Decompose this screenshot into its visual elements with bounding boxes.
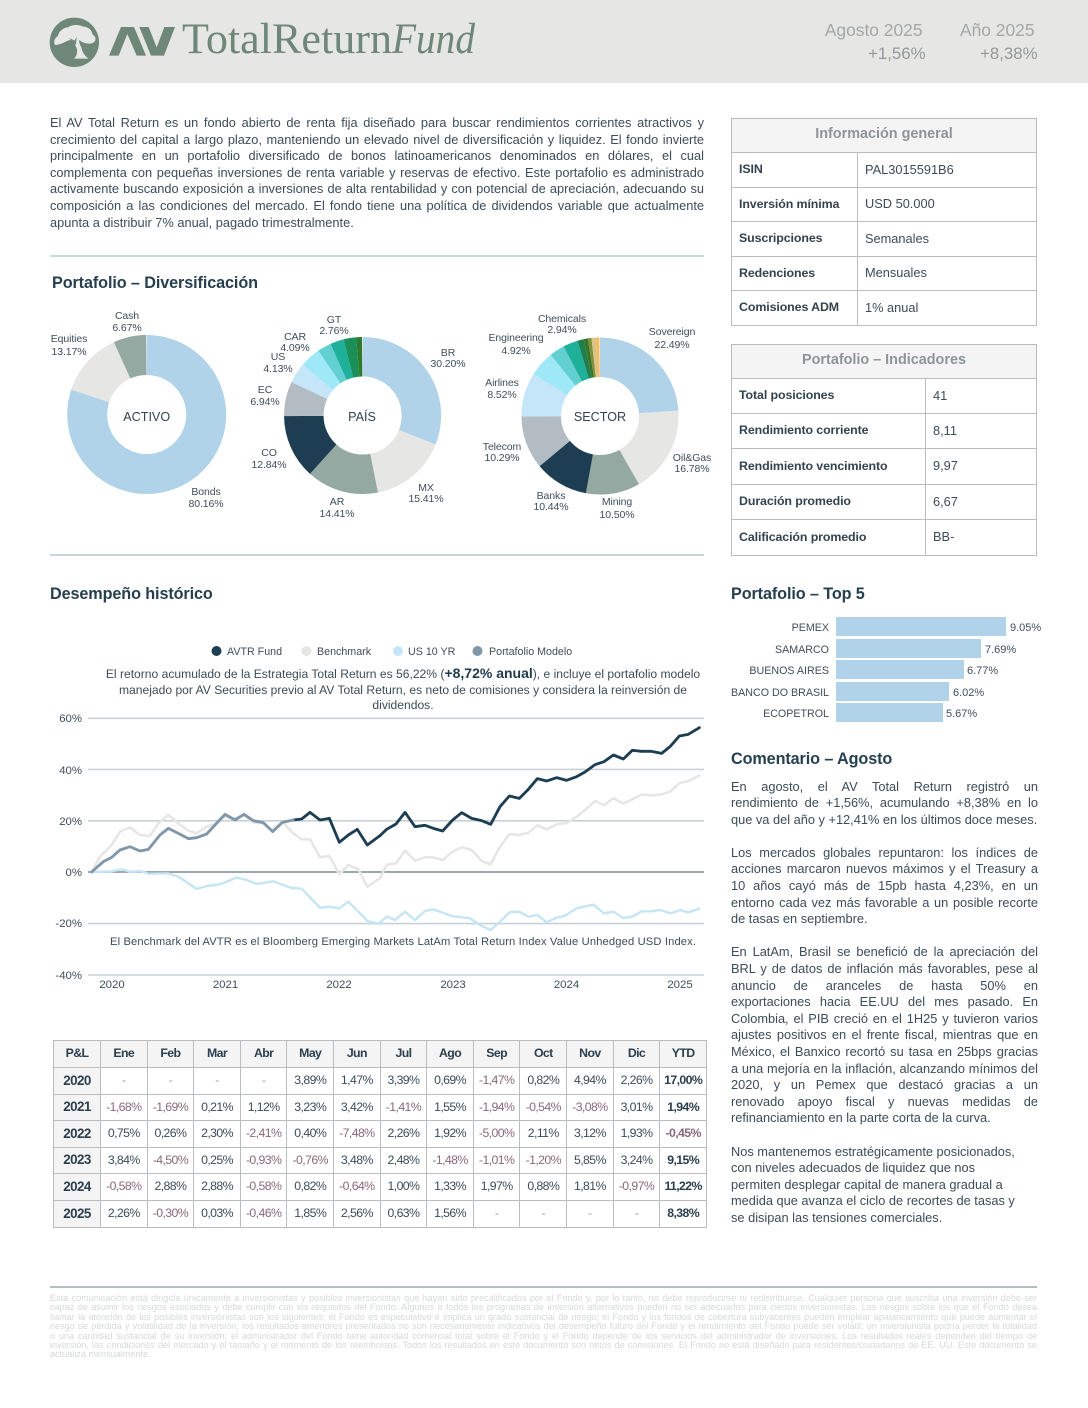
heading: Comentario Agosto: Comentario – Agosto	[731, 750, 892, 768]
heading: Portafolio Diversificación: Portafolio – Diversificación	[52, 274, 258, 292]
P&L table: Mar	[207, 1046, 227, 1060]
bar chart: Top 5: BANCO DO BRASIL	[731, 687, 829, 699]
labels: PAÍS: AR	[330, 496, 345, 508]
chart legend	[212, 646, 572, 658]
labels: SECTOR: Chemicals	[538, 313, 586, 325]
P&L table: -0,54%	[526, 1100, 561, 1114]
panel: Portafolio Indicadores: 9,97	[933, 458, 958, 473]
P&L table: 3,01%	[621, 1100, 652, 1114]
P&L table: -1,41%	[386, 1100, 421, 1114]
series: US 10 YR	[92, 869, 699, 930]
labels: ACTIVO: Cash	[115, 310, 139, 322]
P&L table: -0,58%	[106, 1179, 141, 1193]
P&L table: Ene	[113, 1046, 134, 1060]
P&L table: 2,30%	[201, 1126, 233, 1140]
axis labels: 2020	[99, 979, 125, 991]
labels: ACTIVO: 80.16%	[188, 498, 224, 510]
labels: PAÍS: 4.13%	[263, 363, 293, 375]
labels: SECTOR	[483, 313, 711, 521]
commentary text: de tasas en septiembre.	[731, 911, 868, 926]
P&L table: 3,24%	[621, 1152, 652, 1166]
commentary text	[731, 778, 1038, 1225]
axis labels: 20%	[59, 816, 82, 828]
P&L table: Jun	[347, 1046, 367, 1060]
P&L table: -	[635, 1206, 638, 1220]
P&L table: 1,94%	[667, 1100, 699, 1114]
labels: SECTOR: 2.94%	[547, 324, 577, 336]
labels: PAÍS: CO	[261, 447, 277, 459]
panel: Portafolio Indicadores: BB-	[933, 529, 954, 544]
labels: PAÍS: CAR	[284, 331, 306, 343]
P&L table: -	[169, 1073, 172, 1087]
donut: SECTOR	[541, 357, 659, 475]
axis labels: -40%	[55, 970, 82, 982]
P&L table: -	[215, 1073, 219, 1087]
P&L table: Ago	[439, 1046, 461, 1060]
P&L table: 2,48%	[388, 1152, 419, 1166]
P&L table: 1,55%	[434, 1100, 466, 1114]
P&L table: YTD	[672, 1046, 695, 1060]
P&L table: Abr	[254, 1046, 273, 1060]
panel: Información general	[731, 118, 1037, 326]
axis labels: 2024	[554, 979, 579, 991]
commentary text: 2020, y un Pemex que destacó gracias a un	[731, 1077, 1038, 1092]
labels: ACTIVO: 6.67%	[112, 322, 142, 334]
commentary text: que va del año y +12,41% en los últimos doce meses.	[731, 812, 1037, 827]
panel: Portafolio Indicadores: Duración promedio	[739, 494, 851, 508]
P&L table: -0,46%	[246, 1206, 281, 1220]
header figure: Agosto 2025: Agosto 2025	[825, 20, 922, 40]
bar chart: Top 5: 6.77%	[967, 665, 998, 677]
panel: Portafolio Indicadores: 41	[933, 388, 947, 402]
P&L table: Nov	[579, 1046, 601, 1060]
panel: Información general: 1% anual	[865, 300, 918, 314]
intro paragraph: El AV Total Return es un fondo abierto de renta fija diseñado para buscar rendimientos corrientes atractivos y	[50, 115, 704, 130]
intro paragraph: complementa con pequeñas inversiones de renta variable y reservas de efectivo. Este portafolio es administrado	[50, 165, 704, 180]
panel: Portafolio Indicadores	[731, 344, 1037, 556]
labels: PAÍS: 12.84%	[251, 459, 287, 471]
labels: PAÍS: MX	[418, 482, 434, 494]
labels: PAÍS: PAÍS	[348, 409, 376, 424]
commentary text: con niveles adecuados de liquidez que nos	[731, 1160, 975, 1175]
bar chart: Top 5: 7.69%	[985, 644, 1016, 656]
axis labels: 2023	[440, 979, 466, 991]
labels: PAÍS: 15.41%	[408, 493, 444, 505]
bar chart: Top 5: 5.67%	[946, 708, 977, 720]
P&L table: 0,21%	[201, 1100, 233, 1114]
panel: Portafolio Indicadores: 8,11	[933, 422, 957, 438]
labels: PAÍS: 2.76%	[319, 325, 349, 337]
panel: Información general: Información general	[815, 126, 953, 142]
labels: SECTOR: SECTOR	[574, 410, 626, 424]
P&L table: 2,56%	[341, 1206, 373, 1220]
P&L table: -0,58%	[246, 1179, 281, 1193]
labels: PAÍS: BR	[441, 347, 456, 359]
commentary text: anuncio de aranceles de hasta 50% en	[731, 978, 1038, 993]
legal disclaimer: capaz de asumir los riesgos asociados y debe cumplir con los requisitos del Fondo. Algunos o todos los programas de inversión alternativos pueden no ser adecuados para ciertos inversionistas. Los riesgos sobre los que el Fondo desea	[50, 1302, 1037, 1312]
legal disclaimer: llamar la atención de los posibles inversionistas son los siguientes: el Fondo es especulativo e implica un grado sustancial de riesgo; el Fondo y los fondos de cobertura subyacentes pueden emplear apalancamiento que puede aumentar el	[50, 1312, 1037, 1322]
commentary text: entorno cada vez más favorable a un posible recorte	[731, 895, 1038, 910]
commentary text: En LatAm, Brasil se benefició de la apreciación del	[731, 944, 1038, 959]
labels: ACTIVO: ACTIVO	[123, 410, 170, 424]
series: Portafolio Modelo	[92, 814, 293, 872]
intro paragraph: activamente buscando exposición a inversiones de alta rentabilidad y con potencial de apreciación, adecuando su	[50, 181, 704, 196]
P&L table: 0,26%	[154, 1126, 186, 1140]
grid and axis	[88, 718, 704, 975]
bar chart: Top 5: 9.05%	[1010, 622, 1041, 634]
P&L table: -0,97%	[619, 1179, 654, 1193]
P&L table: 1,47%	[341, 1073, 373, 1087]
intro paragraph: composición a las condiciones del mercado. El fondo tiene una política de dividendos variable que actualmente	[50, 198, 704, 213]
axis labels: 0%	[66, 867, 82, 879]
commentary text: BRL y de datos de inflación más favorables, pese al	[731, 961, 1038, 976]
P&L table: 3,48%	[341, 1152, 373, 1166]
labels: SECTOR: 22.49%	[654, 339, 690, 351]
P&L table: 1,97%	[481, 1179, 513, 1193]
P&L table: 2025	[63, 1206, 91, 1220]
P&L table: 3,23%	[294, 1100, 326, 1114]
axis labels: 60%	[59, 713, 82, 725]
P&L table: 2,88%	[201, 1179, 233, 1193]
labels: SECTOR: Sovereign	[649, 326, 695, 338]
chart legend: US 10 YR	[408, 646, 456, 658]
P&L table: 1,81%	[574, 1179, 606, 1193]
P&L table: 17,00%	[664, 1073, 702, 1087]
labels: SECTOR: Oil&Gas	[673, 452, 711, 464]
intro paragraph: crecimiento del capital a largo plazo, manteniendo un elevado nivel de diversificación y liquidez. El fondo invierte	[50, 132, 704, 147]
bar chart: Top 5: 6.02%	[953, 687, 984, 699]
axis labels: 2025	[667, 979, 693, 991]
panel: Información general: Semanales	[865, 230, 929, 246]
labels: PAÍS: EC	[258, 384, 273, 396]
P&L table: -2,41%	[246, 1126, 281, 1140]
labels: SECTOR: Airlines	[485, 377, 519, 389]
P&L table: -	[588, 1206, 592, 1220]
panel: Información general: Redenciones	[739, 266, 815, 280]
P&L table: Sep	[486, 1046, 507, 1060]
commentary text: permiten desplegar capital de manera gradual a	[731, 1177, 1003, 1192]
P&L table: Feb	[160, 1046, 180, 1060]
P&L table: 0,88%	[527, 1179, 559, 1193]
labels: SECTOR: 10.44%	[533, 501, 569, 513]
P&L table: -	[122, 1073, 126, 1087]
chart caption: manejado por AV Securities previo al AV Total Return, es neto de comisiones y considera la reinversión de	[119, 682, 687, 696]
commentary text: exportaciones hacia EE.UU del mes pasado. En	[731, 994, 1038, 1009]
axis labels: -20%	[55, 918, 82, 930]
bar chart: Top 5: SAMARCO	[775, 644, 829, 656]
P&L table: 1,56%	[434, 1206, 466, 1220]
header figure: Año 2025	[960, 20, 1038, 63]
header band	[0, 0, 1088, 83]
P&L table: 2023	[63, 1152, 91, 1167]
labels: SECTOR: 8.52%	[487, 389, 517, 401]
P&L table: 0,82%	[527, 1073, 559, 1087]
P&L table: 3,39%	[388, 1073, 419, 1087]
benchmark note: El Benchmark del AVTR es el Bloomberg Emerging Markets LatAm Total Return Index Value Unhedged USD Index.	[110, 936, 696, 948]
labels: PAÍS: 4.09%	[280, 342, 310, 354]
line chart: historical performance	[55, 713, 704, 991]
P&L table: -0,93%	[246, 1152, 281, 1166]
legal disclaimer: Esta comunicación está dirigida únicamente a inversionistas y posibles inversionistas que hayan sido precalificados por el Fondo y, por lo tanto, no debe reproducirse ni redistribuirse. Cualquier persona que suscriba una inversión debe ser	[50, 1293, 1037, 1303]
P&L table: -0,45%	[665, 1126, 701, 1140]
commentary text: medida que avanza el ciclo de recortes de tasas y	[731, 1193, 1015, 1208]
legal disclaimer: riesgo de pérdida y volatilidad de la inversión; los resultados anteriores presentados no son necesariamente indicativos del desempeño futuro del Fondo y el rendimiento del Fondo puede ser volátil; un inversionista podría perder la totalidad	[50, 1321, 1037, 1331]
commentary text: se disipan las tensiones comerciales.	[731, 1210, 942, 1225]
P&L table: Oct	[534, 1046, 553, 1060]
labels: ACTIVO: Bonds	[191, 486, 221, 498]
commentary text: refinanciamiento en la parte corta de la curva.	[731, 1110, 991, 1125]
P&L table: 5,85%	[574, 1152, 606, 1166]
logo: AV Total Return Fund: TotalReturn	[182, 16, 392, 63]
labels: PAÍS: 6.94%	[250, 396, 280, 408]
labels: SECTOR: Engineering	[489, 332, 544, 344]
axis labels: 2022	[326, 979, 352, 991]
panel: Portafolio Indicadores: Total posiciones	[739, 388, 834, 402]
labels: SECTOR: Telecom	[483, 441, 522, 453]
P&L table: 0,63%	[388, 1206, 419, 1220]
logo: AV Total Return Fund: Fund	[391, 16, 475, 63]
P&L table: 2,11%	[528, 1126, 559, 1140]
P&L table: 2024	[63, 1178, 91, 1194]
axis labels: 2021	[213, 979, 238, 991]
panel: Información general: Mensuales	[865, 265, 927, 280]
P&L table: 2022	[63, 1126, 91, 1140]
P&L table: -4,50%	[153, 1152, 188, 1166]
P&L table	[53, 1040, 707, 1228]
P&L table: 1,12%	[248, 1100, 280, 1114]
panel: Portafolio Indicadores: Portafolio – Indicadores	[802, 352, 966, 368]
labels: SECTOR: 16.78%	[674, 463, 710, 475]
P&L table: 2020	[63, 1072, 91, 1088]
intro paragraph: apunta a distribuir 7% anual, pagado trimestralmente.	[50, 215, 354, 230]
P&L table: 3,84%	[108, 1152, 140, 1166]
panel: Portafolio Indicadores: Calificación promedio	[739, 530, 866, 544]
commentary text: acciones marcaron nuevos máximos y el Treasury a	[731, 861, 1038, 876]
legal disclaimer: o una cantidad sustancial de su inversión; el administrador del Fondo tiene autoridad comercial total sobre el Fondo y el Fondo depende de los servicios del administrador de inversiones. Los resultados reales dependen del tiempo de	[50, 1331, 1037, 1341]
heading: Desempeño histórico: Desempeño histórico	[50, 585, 213, 603]
panel: Información general: ISIN	[739, 162, 763, 176]
P&L table: 11,22%	[664, 1179, 702, 1193]
P&L table: 3,42%	[341, 1100, 373, 1114]
chart legend: Portafolio Modelo	[489, 646, 572, 658]
commentary text: rendimiento de +1,56%, acumulando +8,38% en lo	[731, 795, 1038, 810]
panel: Información general: Inversión mínima	[739, 196, 839, 210]
commentary text: renovado apoyo fiscal y nuevas medidas de	[731, 1094, 1038, 1109]
P&L table: 3,12%	[574, 1126, 606, 1140]
intro paragraph: principalmente en un portafolio diversificado de bonos latinoamericanos denominados en dólares, el cual	[50, 148, 704, 163]
P&L table: -1,47%	[479, 1073, 514, 1087]
P&L table: -7,48%	[339, 1126, 375, 1140]
P&L table: 4,94%	[574, 1073, 606, 1087]
P&L table: 0,82%	[294, 1179, 326, 1193]
header figure: Agosto 2025: +1,56%	[868, 44, 926, 63]
P&L table: -	[542, 1206, 545, 1220]
header figure: Año 2025: Año 2025	[960, 20, 1034, 40]
P&L table: 2,26%	[388, 1126, 419, 1140]
legal disclaimer: inversión, las condiciones del mercado y el tamaño y el momento de los reembolsos. Todos los resultados en este documento son netos de comisiones. El Fondo no está diseñado para residentes/ciudadanos de EE. UU. Este documento se	[50, 1340, 1037, 1350]
P&L table: -1,48%	[432, 1152, 468, 1166]
P&L table: 0,69%	[434, 1073, 466, 1087]
labels: PAÍS: GT	[327, 314, 342, 326]
P&L table: 2,88%	[154, 1179, 186, 1193]
P&L table: 1,33%	[434, 1179, 466, 1193]
P&L table: 0,40%	[294, 1126, 326, 1140]
chart legend: Benchmark	[317, 646, 372, 658]
bar chart: Top 5: ECOPETROL	[763, 708, 829, 720]
P&L table: 2021	[63, 1099, 91, 1114]
P&L table: Jul	[395, 1046, 411, 1060]
P&L table: 0,25%	[201, 1152, 233, 1166]
P&L table: 0,03%	[201, 1206, 233, 1220]
labels: ACTIVO: Equities	[51, 333, 87, 345]
intro paragraph	[50, 115, 704, 230]
panel: Información general: Comisiones ADM	[739, 300, 839, 314]
chart caption	[106, 665, 700, 712]
axis labels	[55, 713, 693, 991]
commentary text: Los mercados globales repuntaron: los índices de	[731, 845, 1038, 860]
commentary text: En agosto, el AV Total Return registró un	[731, 778, 1038, 794]
commentary text: a una mejoría en la inflación, alcanzando mínimos del	[731, 1061, 1038, 1076]
commentary text: México, el Banxico recortó su tasa en 25bps gracias	[731, 1044, 1038, 1059]
P&L table: 2,26%	[108, 1206, 140, 1220]
commentary text: Nos mantenemos estratégicamente posicionados,	[731, 1144, 1015, 1159]
labels: PAÍS	[250, 314, 466, 520]
bar chart: Top 5: BUENOS AIRES	[749, 665, 829, 677]
P&L table: -1,68%	[106, 1100, 141, 1114]
header figure: Año 2025: +8,38%	[980, 44, 1038, 63]
donut: ACTIVO	[87, 355, 206, 474]
panel: Portafolio Indicadores: 6,67	[933, 494, 958, 508]
P&L table: P&L	[66, 1046, 88, 1060]
labels: ACTIVO	[51, 310, 224, 510]
series: Benchmark	[92, 776, 699, 887]
header figure: Agosto 2025	[825, 20, 926, 63]
panel: Información general: PAL3015591B6	[865, 162, 954, 176]
P&L table: May	[299, 1046, 321, 1060]
P&L table: Dic	[628, 1046, 645, 1060]
axis labels: 40%	[59, 765, 82, 777]
P&L table: 2,26%	[621, 1073, 652, 1087]
panel: Información general: USD 50.000	[865, 196, 935, 211]
donut: PAÍS	[304, 357, 421, 474]
labels: SECTOR: 10.29%	[484, 452, 520, 464]
P&L table: -1,01%	[479, 1152, 514, 1166]
P&L table: 1,00%	[388, 1179, 419, 1193]
P&L table: -0,76%	[293, 1152, 328, 1166]
labels: SECTOR: 4.92%	[501, 345, 531, 357]
P&L table: -1,69%	[153, 1100, 188, 1114]
P&L table: 0,75%	[108, 1126, 140, 1140]
P&L table: -5,00%	[479, 1126, 514, 1140]
legal disclaimer: actualiza mensualmente.	[50, 1349, 151, 1359]
P&L table: -	[262, 1073, 265, 1087]
P&L table: 3,89%	[294, 1073, 326, 1087]
P&L table: 9,15%	[667, 1152, 699, 1166]
bar chart: Top 5: PEMEX	[792, 622, 829, 634]
chart caption: El retorno acumulado de la Estrategia Total Return es 56,22% (+8,72% anual), e incluye el portafolio modelo	[106, 665, 700, 681]
P&L table: 1,93%	[621, 1126, 652, 1140]
labels: PAÍS: 14.41%	[319, 508, 355, 520]
logo: AV Total Return Fund	[50, 16, 476, 67]
legal disclaimer	[50, 1293, 1037, 1359]
P&L table: -	[495, 1206, 498, 1220]
heading: Portafolio Top 5: Portafolio – Top 5	[731, 585, 865, 603]
series: AVTR Fund	[293, 728, 699, 845]
P&L table: -1,94%	[479, 1100, 514, 1114]
labels: SECTOR: 10.50%	[599, 509, 635, 521]
P&L table: -3,08%	[572, 1100, 608, 1114]
P&L table: -1,20%	[526, 1152, 561, 1166]
commentary text: Colombia, el PIB creció en el 1H25 y tuvieron varios	[731, 1011, 1038, 1026]
labels: PAÍS: US	[271, 351, 285, 363]
donut charts	[51, 310, 711, 521]
commentary text: ajustes positivos en el frente fiscal, mientras que en	[731, 1027, 1038, 1042]
P&L table: 8,38%	[667, 1206, 699, 1220]
labels: SECTOR: Banks	[537, 490, 565, 502]
chart legend: AVTR Fund	[227, 646, 282, 658]
labels: SECTOR: Mining	[602, 496, 632, 508]
commentary text: 10 años cayó más de 15pb hasta 4,23%, en un	[731, 878, 1038, 893]
labels: ACTIVO: 13.17%	[51, 346, 87, 358]
labels: PAÍS: 30.20%	[430, 358, 466, 370]
P&L table: -0,30%	[153, 1206, 188, 1220]
chart caption: dividendos.	[372, 698, 434, 712]
P&L table: 1,85%	[294, 1206, 326, 1220]
P&L table: -0,64%	[339, 1179, 375, 1193]
P&L table: 1,92%	[434, 1126, 466, 1140]
bar chart: Top 5	[731, 617, 1041, 722]
panel: Portafolio Indicadores: Rendimiento vencimiento	[739, 458, 887, 472]
panel: Portafolio Indicadores: Rendimiento corriente	[739, 423, 868, 437]
panel: Información general: Suscripciones	[739, 231, 822, 245]
